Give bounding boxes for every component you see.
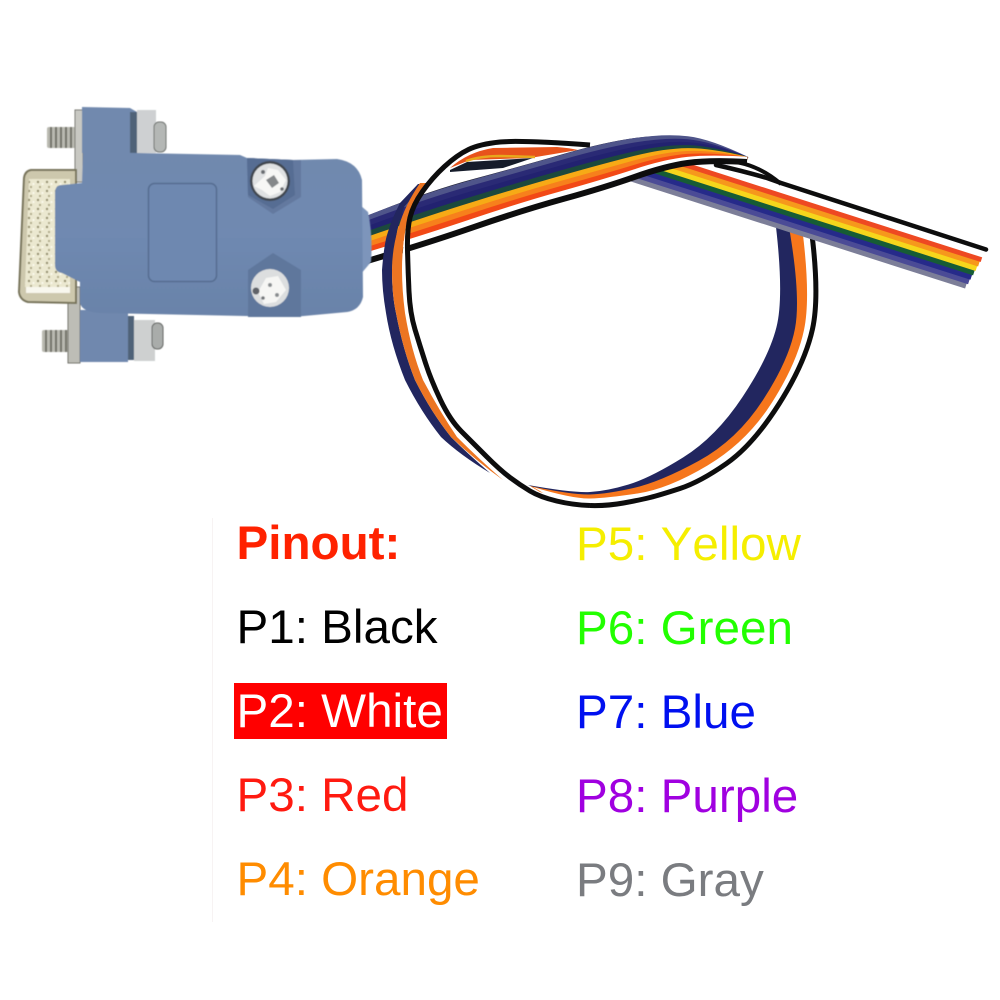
legend: P1: P1: Black [236, 601, 438, 654]
faint vertical divider [212, 518, 213, 922]
cable: left loop passing in front [382, 141, 590, 505]
connector: lower screw and plate [42, 287, 163, 363]
legend: P5: P5: Yellow [576, 518, 801, 571]
legend: P3: P3: Red [236, 769, 408, 822]
connector: cable boot [360, 205, 372, 275]
legend: P4: P4: Orange [236, 853, 480, 906]
connector: top screw recess [247, 158, 301, 214]
connector: upper screw and plate [47, 107, 166, 182]
legend heading: Pinout: [236, 517, 400, 570]
legend: P8: P8: Purple [576, 770, 798, 823]
DB9 connector [19, 107, 372, 363]
connector: recessed label window [148, 184, 216, 282]
legend: P6: P6: Green [576, 602, 793, 655]
cable: flat free end with nine wires [625, 161, 986, 286]
pinout legend [234, 517, 801, 907]
cable: top of loop behind main ribbon [450, 147, 578, 172]
cable: lower right loop [528, 227, 816, 506]
ribbon cable [362, 137, 986, 506]
legend: P2 white on red: P2: White [236, 685, 443, 738]
connector: bottom screw recess [248, 253, 301, 317]
legend: P9: P9: Gray [576, 854, 764, 907]
cable: main ribbon from connector [362, 137, 747, 262]
connector: grey-blue hood [55, 152, 363, 317]
connector: metal D-shell [19, 170, 76, 303]
legend: P7: P7: Blue [576, 686, 756, 739]
